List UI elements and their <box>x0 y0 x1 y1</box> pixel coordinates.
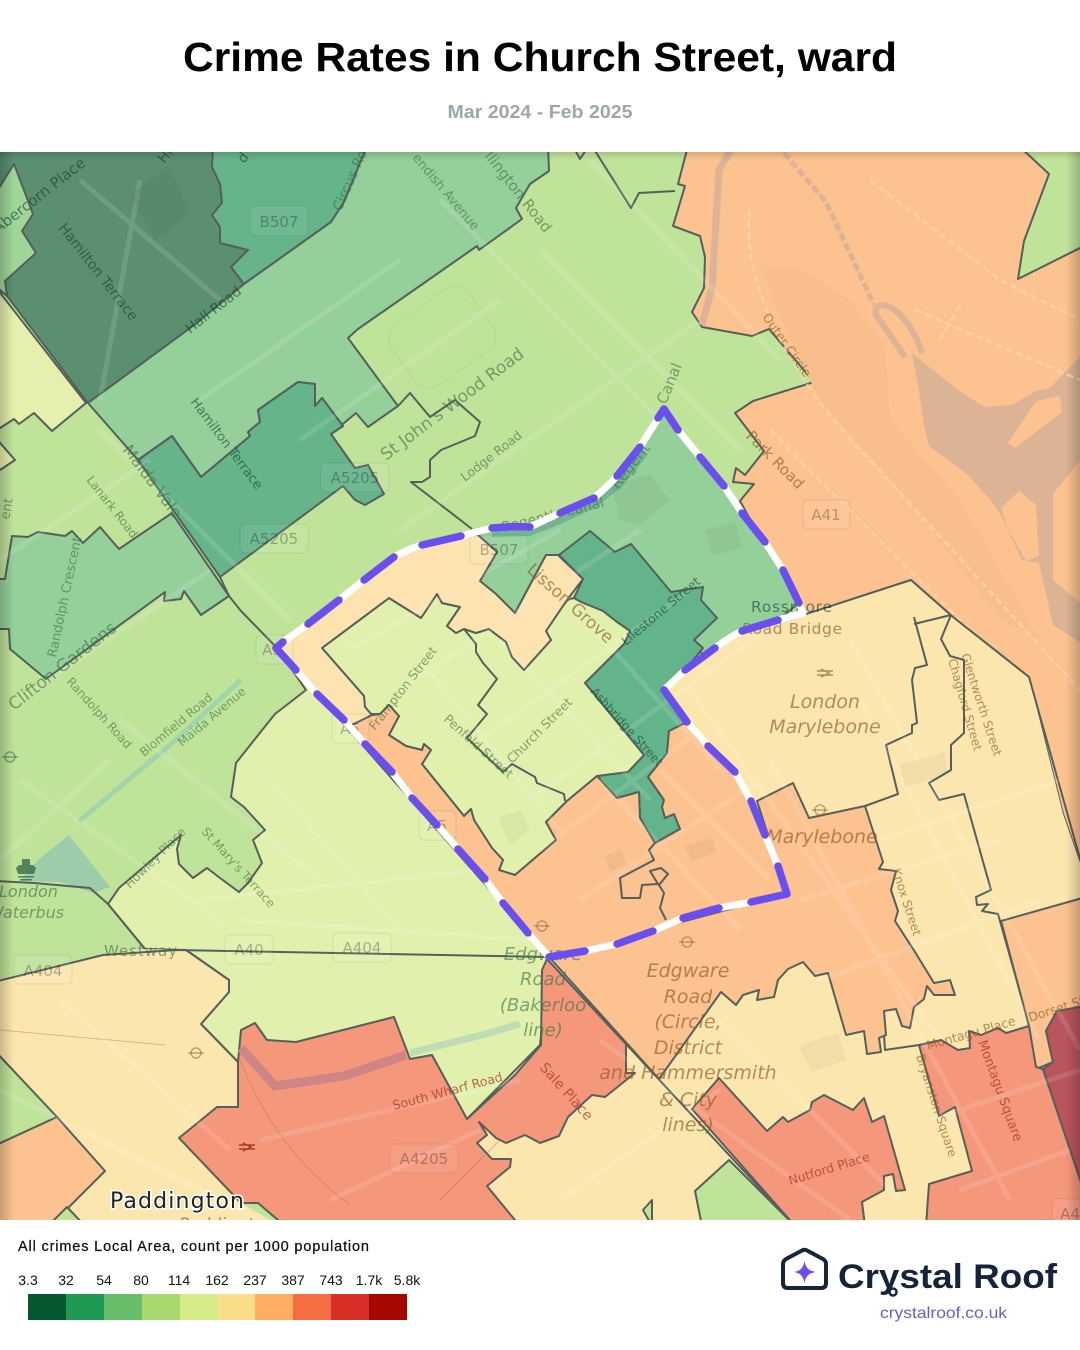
railway: Paddington tracks <box>0 1030 500 1206</box>
legend tick labels: 387 <box>281 1272 305 1288</box>
region: Maida Vale mid green <box>138 382 384 577</box>
station and place labels: (Bakerloo <box>500 995 586 1016</box>
region: Montagu Square red <box>919 1026 1080 1226</box>
shield A4: A4 <box>1060 1205 1080 1223</box>
shield A404 left: A404 <box>24 962 62 980</box>
shield B507 ward: B507 <box>480 541 518 559</box>
station and place labels: Paddington <box>110 1189 244 1214</box>
street labels: Canal <box>653 360 686 406</box>
region: south-east cream base <box>479 580 1080 1226</box>
station and place labels: London <box>0 882 58 901</box>
station and place labels: Marylebone <box>766 826 878 848</box>
region: west small pale <box>0 442 16 472</box>
region: far-east orange <box>1001 897 1080 1069</box>
region: Hamilton Terrace light-mid green <box>88 146 549 477</box>
street labels: Bryanston Square <box>913 1053 960 1159</box>
shield A5 <box>419 811 456 840</box>
station and place labels: Marylebone <box>769 716 881 738</box>
street labels: St John's Wood Road <box>377 344 528 465</box>
title: Crime Rates in Church Street, ward <box>183 34 897 80</box>
street labels: Lodge Road <box>458 427 525 484</box>
stadium outline <box>382 279 503 395</box>
street labels: Frampton Street <box>366 643 440 733</box>
boundary line: north tiny notch <box>575 152 586 160</box>
street labels: St Mary's Terrace <box>199 825 278 910</box>
street labels: Penfold Street <box>441 711 517 781</box>
legend <box>18 1239 421 1320</box>
shield A4205 <box>390 1144 458 1173</box>
shield A4205: A4205 <box>400 1150 448 1168</box>
region: west orange bottom <box>0 1117 105 1226</box>
building patches <box>130 165 948 1072</box>
boundary: Montagu Place <box>884 1035 919 1050</box>
shield B507 <box>250 206 308 236</box>
ward: mid green Lilestone <box>559 531 717 843</box>
park: boating lake loop <box>876 305 922 357</box>
ward: cream Lisson Grove <box>277 535 583 726</box>
website url: crystalroof.co.uk <box>880 1305 1008 1322</box>
street labels: Howley Place <box>122 825 188 891</box>
street labels: Blomfield Road <box>137 690 215 759</box>
region: Marylebone orange <box>549 783 955 1079</box>
region: Paddington basin pale <box>108 648 549 1119</box>
shield A40: A40 <box>234 941 264 959</box>
legend tick labels: 3.3 <box>18 1272 38 1288</box>
road shields <box>14 206 1080 1228</box>
park: stream <box>702 146 733 325</box>
street labels: Regent <box>607 439 654 492</box>
park: lake island north <box>1008 396 1062 448</box>
subtitle: date range: Mar 2024 - Feb 2025 <box>448 101 632 122</box>
street labels: Circus Road <box>330 132 378 214</box>
street labels: Lanark Road <box>84 473 141 541</box>
region: Randolph Crescent light-mid green <box>0 513 229 679</box>
legend tick labels: 54 <box>96 1272 112 1288</box>
street labels: d <box>235 150 253 166</box>
street labels: Montagu Place <box>925 1013 1018 1053</box>
street labels: Randolph Road <box>64 675 135 751</box>
street grid <box>0 160 1080 1220</box>
region: bottom tiny green <box>643 1200 652 1226</box>
region: west green bottom <box>0 1050 57 1146</box>
street labels: Montagu Square <box>974 1038 1025 1144</box>
shield A5 upper <box>332 714 369 743</box>
legend tick labels: 114 <box>168 1272 190 1288</box>
legend colour bar <box>28 1294 407 1320</box>
ward: pale green centre <box>322 594 644 875</box>
ward: orange inner boundary <box>620 843 668 920</box>
region: Abercorn light green <box>0 164 36 296</box>
canal strip in ward <box>492 452 645 533</box>
region: Nutford Place red <box>692 1078 905 1226</box>
street labels: Randolph Crescent <box>45 536 85 659</box>
legend tick labels: 1.7k <box>356 1272 383 1288</box>
region: Paddington red <box>179 959 635 1226</box>
park: darker lawn <box>804 370 815 384</box>
legend tick labels: 32 <box>58 1272 74 1288</box>
street labels: Maida Vale <box>119 441 186 522</box>
park: lake <box>912 350 1080 646</box>
station and place labels: (Circle, <box>654 1011 722 1033</box>
street labels: Regent's Canal <box>500 495 606 536</box>
station and place labels: & City <box>659 1089 718 1111</box>
boundary: London Marylebone east <box>865 617 927 806</box>
region: bottom green <box>695 1160 795 1226</box>
station and place labels <box>0 691 881 1235</box>
legend tick labels <box>18 1272 421 1288</box>
street labels: Outer Circle <box>760 310 815 380</box>
street labels: llington Road <box>481 147 556 236</box>
legend title: All crimes Local Area, count per 1000 population <box>18 1239 369 1255</box>
street labels: Clifton Gardens <box>5 618 121 715</box>
station and place labels: and Hammersmith <box>599 1062 777 1084</box>
region: west pale wedge <box>0 285 86 432</box>
region: B507 mid green <box>212 146 367 284</box>
street labels: Maida Avenue <box>175 684 249 749</box>
station and place labels: Paddington <box>179 1215 275 1235</box>
station and place labels: Edgware <box>647 960 729 982</box>
canal: Little Venice pool <box>20 835 110 893</box>
street labels: Hall Road <box>183 284 245 337</box>
region: top-right green <box>1018 146 1080 279</box>
logo y keyhole <box>890 1288 896 1296</box>
region: Dorset Square dark red <box>1043 1006 1080 1197</box>
station and place labels: London <box>790 691 860 713</box>
station and place labels: line) <box>523 1020 563 1041</box>
icon: rail stations <box>239 669 833 1151</box>
street labels: Hamilton Terrace <box>55 221 141 324</box>
icon: ferry <box>16 859 36 880</box>
street labels <box>0 132 1080 1188</box>
boundary line: north lobe <box>594 152 676 209</box>
ward: orange south <box>350 705 787 957</box>
street labels: Hamilton Terrace <box>187 395 265 493</box>
street labels: Lisson Grove <box>523 560 617 648</box>
shield A404 mid: A404 <box>343 939 381 957</box>
street labels: Lilestone Street <box>618 574 703 648</box>
shield A5205 south <box>240 524 308 553</box>
region: dark green Hamilton Terrace area <box>0 146 248 403</box>
ward: north-east light-mid green <box>478 409 799 654</box>
shield A40 <box>225 935 273 964</box>
street labels: Ashbridge Street <box>588 685 666 769</box>
region: small green bottom <box>52 1206 81 1220</box>
shield B507: B507 <box>260 213 298 231</box>
shield A41: A41 <box>811 506 841 524</box>
park: paths <box>749 180 1080 690</box>
canal: Paddington arm <box>241 1048 406 1086</box>
shield A404 left <box>14 955 72 984</box>
street labels: Knox Street <box>889 867 924 938</box>
shield A5 upper: A5 <box>340 720 360 738</box>
shield A5: A5 <box>427 817 447 835</box>
park: railway dashed <box>784 153 874 305</box>
waterline boundary <box>0 881 145 949</box>
street labels: South Wharf Road <box>391 1069 504 1113</box>
icon: tube roundels <box>2 752 828 1058</box>
shield A5205 south: A5205 <box>250 530 298 548</box>
region: Regent's Park orange <box>673 146 1080 880</box>
shield A4 <box>1052 1199 1080 1228</box>
legend tick labels: 237 <box>243 1272 267 1288</box>
ward internal boundary <box>464 629 565 801</box>
canal: arm in pale <box>410 1024 520 1053</box>
boundary: Rossmore upper cream edge <box>803 580 1080 880</box>
street labels: Chagford Street <box>945 657 985 753</box>
street labels: Sale Place <box>536 1060 596 1124</box>
street labels: Road Bridge <box>742 620 842 638</box>
legend tick labels: 80 <box>133 1272 149 1288</box>
boundary line: St John's Wood <box>398 393 480 529</box>
station and place labels: District <box>654 1037 724 1059</box>
shield A5 corner: A5 <box>262 641 282 659</box>
street labels: Hill <box>155 139 181 167</box>
boundary: cream edge <box>186 950 238 1062</box>
street labels: Church Street <box>504 695 575 766</box>
boundary white underlay <box>276 409 803 957</box>
legend tick labels: 162 <box>205 1272 229 1288</box>
legend tick labels: 743 <box>319 1272 343 1288</box>
park: lake island south <box>1001 491 1039 561</box>
shield A5 corner <box>256 635 293 664</box>
street labels: Westway <box>104 942 177 960</box>
region: lower-left cream <box>0 949 280 1226</box>
logo: Crystal Roof <box>783 1250 1058 1322</box>
shield A404 mid <box>333 933 391 962</box>
street labels: Park Road <box>742 427 808 493</box>
street labels: Nutford Place <box>786 1149 872 1188</box>
legend tick labels: 5.8k <box>394 1272 421 1288</box>
boundary: Chagford Street <box>914 615 1036 1069</box>
street labels: Rossmore <box>751 598 832 616</box>
station and place labels: lines) <box>662 1114 714 1136</box>
shield B507 ward <box>470 535 528 564</box>
region: Westway boundary line <box>0 950 549 982</box>
station and place labels: Road <box>664 986 713 1008</box>
street labels: endish Avenue <box>409 151 482 234</box>
boundary line: Maida Vale <box>220 577 277 648</box>
boundary purple dashes <box>276 409 799 957</box>
station and place labels: Edgware <box>504 944 582 965</box>
shield A5205 north: A5205 <box>331 469 379 487</box>
shield A5205 north <box>321 463 389 492</box>
canal: Maida Avenue <box>79 680 241 821</box>
line: diagonal Edgware Road <box>548 960 776 1205</box>
icon: house with star <box>783 1250 826 1288</box>
shield A41 <box>803 500 850 529</box>
map edge vignette <box>0 152 1080 1220</box>
logo wordmark: Crystal Roof <box>838 1258 1058 1296</box>
station and place labels: Road <box>520 969 567 990</box>
street labels: Glentworth Street <box>958 652 1005 758</box>
ward boundary: Church Street dashed outline <box>276 409 803 957</box>
